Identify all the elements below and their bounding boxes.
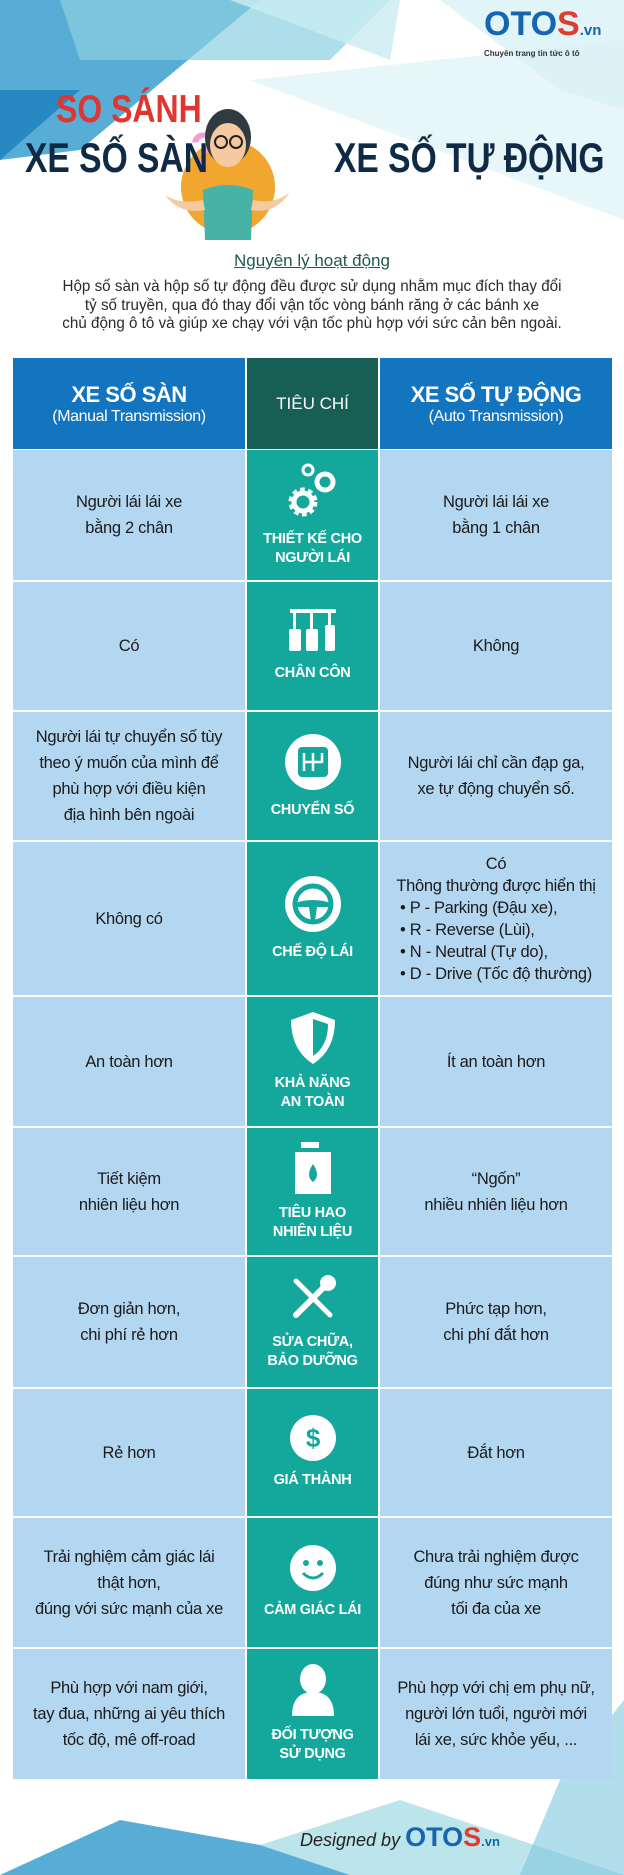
row: design: bằng 1 chân	[452, 519, 540, 537]
row: repair: chi phí rẻ hơn	[80, 1326, 178, 1344]
row: shifting: xe tự động chuyển số.	[417, 780, 575, 798]
header: manual	[13, 358, 245, 449]
row: safety: Ít an toàn hơn	[447, 1052, 545, 1070]
row: price: Rẻ hơn	[102, 1444, 156, 1462]
row: feeling: tối đa của xe	[451, 1600, 541, 1618]
row: feeling: thật hơn,	[97, 1574, 161, 1592]
row: driving mode: Có	[486, 854, 506, 872]
row: fuel: “Ngốn”	[472, 1170, 520, 1188]
row: driving mode	[13, 842, 612, 995]
table	[13, 358, 612, 1779]
row: safety	[13, 997, 612, 1126]
row: shifting: CHUYỂN SỐ	[271, 802, 354, 818]
logo: OTOS: OTOS.vn	[484, 5, 601, 43]
footer: designed by: Designed by OTOS.vn	[300, 1822, 500, 1852]
row: users: Phù hợp với chị em phụ nữ,	[397, 1679, 595, 1697]
header: auto: (Auto Transmission)	[429, 408, 563, 424]
header: manual: XE SỐ SÀN	[71, 382, 187, 406]
header: auto: XE SỐ TỰ ĐỘNG	[411, 382, 581, 406]
row: users	[13, 1649, 612, 1779]
subtitle: principle: Nguyên lý hoạt động	[234, 251, 390, 270]
row: users: ĐỐI TƯỢNG	[271, 1727, 354, 1743]
row: driving mode: • N - Neutral (Tự do),	[400, 942, 548, 960]
illustration: confused woman: ?	[190, 123, 218, 175]
title	[25, 87, 605, 181]
row: feeling: đúng như sức mạnh	[424, 1574, 568, 1592]
row: users: tay đua, những ai yêu thích	[33, 1705, 225, 1723]
row: design: NGƯỜI LÁI	[275, 550, 350, 566]
title: XE SỐ TỰ ĐỘNG	[334, 134, 605, 181]
row: repair: Đơn giản hơn,	[78, 1300, 180, 1318]
header: manual: (Manual Transmission)	[52, 408, 206, 424]
row: price: $	[305, 1423, 320, 1453]
header: criteria	[247, 358, 378, 449]
logo: OTOS: Chuyên trang tin tức ô tô	[484, 49, 580, 58]
row: driving mode: • D - Drive (Tốc độ thường)	[400, 964, 592, 982]
row: driving mode: • R - Reverse (Lùi),	[400, 920, 535, 938]
row: repair: SỬA CHỮA,	[272, 1334, 353, 1350]
row: feeling: Trải nghiệm cảm giác lái	[43, 1548, 214, 1566]
header: criteria: TIÊU CHÍ	[276, 394, 349, 412]
row: shifting: phù hợp với điều kiện	[53, 780, 205, 798]
row: fuel: nhiên liệu hơn	[79, 1196, 179, 1214]
row: feeling: đúng với sức mạnh của xe	[35, 1600, 223, 1618]
row: shifting: địa hình bên ngoài	[64, 806, 194, 824]
row: feeling	[13, 1518, 612, 1647]
row: repair: BẢO DƯỠNG	[267, 1353, 358, 1369]
row: users: SỬ DỤNG	[279, 1746, 346, 1762]
row: fuel: Tiết kiệm	[97, 1170, 161, 1188]
row: safety: An toàn hơn	[85, 1052, 173, 1070]
row: design: Người lái lái xe	[76, 493, 182, 511]
row: price: GIÁ THÀNH	[274, 1472, 351, 1488]
row: fuel	[13, 1128, 612, 1255]
row: shifting	[13, 712, 612, 840]
intro paragraph: tỷ số truyền, qua đó thay đổi vận tốc vòng bánh răng ở các bánh xe	[85, 296, 539, 314]
title: SO SÁNH	[56, 88, 202, 131]
row: safety: KHẢ NĂNG	[275, 1074, 350, 1090]
header: auto	[380, 358, 612, 449]
row: feeling: CẢM GIÁC LÁI	[264, 1602, 361, 1618]
row: feeling: Chưa trải nghiệm được	[413, 1548, 579, 1566]
row: clutch	[13, 582, 612, 710]
intro paragraph: chủ động ô tô và giúp xe chạy với vận tốc phù hợp với sức cản bên ngoài.	[62, 315, 562, 332]
row: repair: chi phí đắt hơn	[443, 1326, 549, 1344]
row: design: THIẾT KẾ CHO	[263, 531, 362, 547]
intro paragraph	[62, 278, 562, 332]
row: shifting: Người lái chỉ cần đạp ga,	[408, 754, 584, 772]
row: price: Đắt hơn	[467, 1444, 525, 1462]
row: users: Phù hợp với nam giới,	[50, 1679, 208, 1697]
row: clutch: CHÂN CÔN	[275, 665, 350, 681]
row: shifting: theo ý muốn của mình để	[39, 754, 219, 772]
row: repair: Phức tạp hơn,	[445, 1300, 547, 1318]
row: fuel: TIÊU HAO	[279, 1204, 346, 1220]
row: design: bằng 2 chân	[85, 519, 173, 537]
row: users: người lớn tuổi, người mới	[405, 1705, 587, 1723]
row: price	[13, 1389, 612, 1516]
row: driving mode: Thông thường được hiển thị	[396, 876, 596, 894]
row: clutch: Có	[119, 637, 139, 655]
row: safety: AN TOÀN	[281, 1094, 344, 1110]
row: driving mode: • P - Parking (Đậu xe),	[400, 898, 557, 916]
row: driving mode: Không có	[95, 910, 163, 928]
row: design	[13, 450, 612, 580]
row: users: lái xe, sức khỏe yếu, ...	[415, 1731, 577, 1749]
row: fuel: NHIÊN LIỆU	[273, 1224, 352, 1240]
row: shifting: Người lái tự chuyển số tùy	[36, 728, 222, 746]
row: driving mode: CHẾ ĐỘ LÁI	[272, 944, 353, 960]
intro paragraph: Hộp số sàn và hộp số tự động đều được sử dụng nhằm mục đích thay đổi	[62, 278, 562, 295]
row: clutch: Không	[473, 637, 519, 655]
row: design: Người lái lái xe	[443, 493, 549, 511]
row: fuel: nhiều nhiên liệu hơn	[424, 1196, 568, 1214]
row: repair	[13, 1257, 612, 1387]
row: users: tốc độ, mê off-road	[63, 1731, 195, 1749]
illustration: confused woman	[165, 109, 290, 240]
title: XE SỐ SÀN	[25, 134, 208, 181]
